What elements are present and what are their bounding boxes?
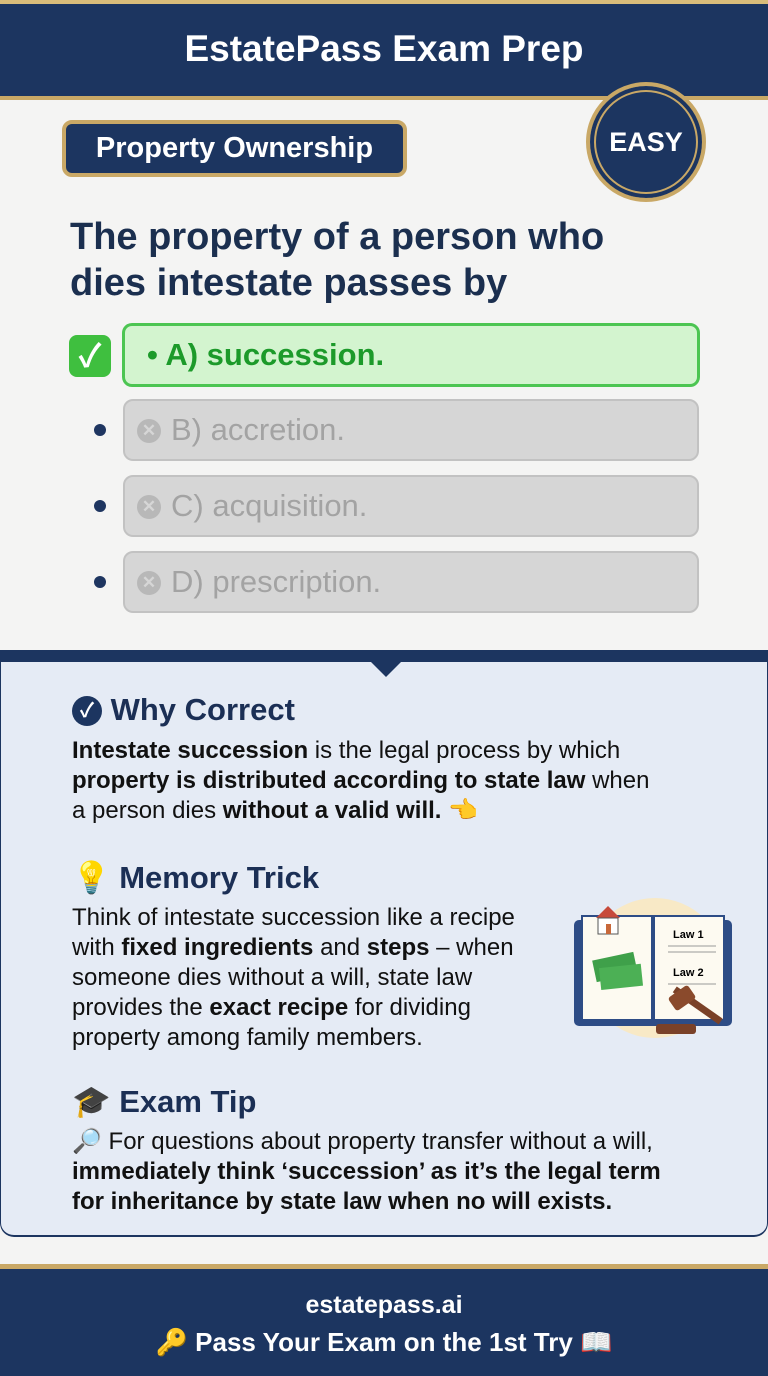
illustration: law book: Law 2 [673, 967, 704, 979]
text: ✕ [142, 497, 156, 516]
text: ✕ [142, 573, 156, 592]
icon: check [69, 335, 111, 377]
exam tip text: 🔎 For questions about property transfer without a will, immediately think ‘succession’ as it’s the legal term for inheritance by state law when no will exists. [72, 1128, 661, 1215]
option A correct: • A) succession. [147, 337, 384, 372]
difficulty badge: EASY [609, 127, 683, 157]
option A correct [122, 323, 700, 387]
option C [94, 475, 699, 537]
category pill: Property Ownership [96, 132, 373, 164]
text: ✕ [142, 421, 156, 440]
explanation panel [0, 650, 768, 1237]
title: EstatePass Exam Prep [184, 28, 584, 69]
why correct heading: ✓ [80, 700, 94, 722]
category pill [62, 120, 407, 177]
option D [94, 551, 699, 613]
exam tip heading: 🎓 Exam Tip [72, 1084, 256, 1119]
header bar [0, 0, 768, 100]
illustration: law book [574, 898, 732, 1038]
text: B) accretion. [171, 412, 345, 447]
icon: check: ✓ [78, 338, 102, 374]
why correct heading: Why Correct [111, 692, 295, 727]
memory text: Think of intestate succession like a recipe with fixed ingredients and steps – when someone dies without a will, state law provides the exact recipe for dividing property among family members. [72, 904, 515, 1051]
footer url: estatepass.ai [305, 1291, 463, 1319]
footer slogan: 🔑 Pass Your Exam on the 1st Try 📖 [156, 1327, 612, 1357]
difficulty badge [586, 82, 706, 202]
question: The property of a person who dies intestate passes by [70, 216, 604, 304]
illustration: law book: Law 1 [673, 929, 704, 941]
footer [0, 1264, 768, 1376]
pointer arrow [370, 661, 402, 677]
memory trick heading: 💡 Memory Trick [72, 860, 319, 895]
text: D) prescription. [171, 564, 381, 599]
text: C) acquisition. [171, 488, 367, 523]
option B [94, 399, 699, 461]
why correct text: Intestate succession is the legal process by which property is distributed according to state law when a person dies without a valid will. 👈 [72, 737, 649, 824]
